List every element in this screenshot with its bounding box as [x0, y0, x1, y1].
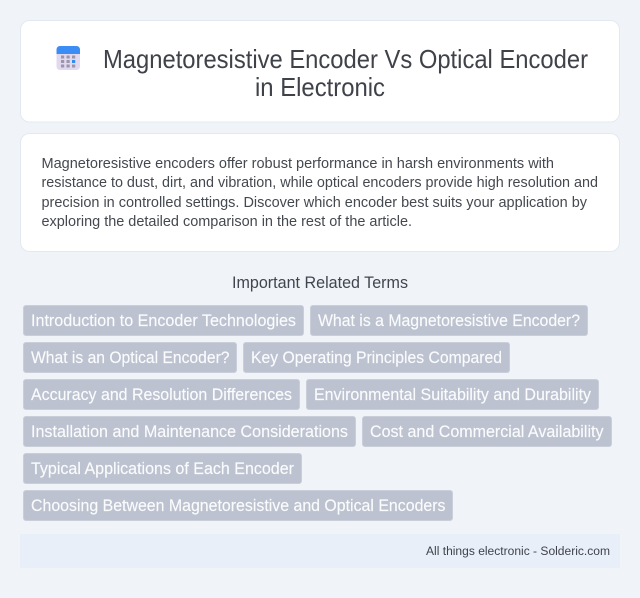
footer: All things electronic - Solderic.com [426, 544, 610, 558]
panel: summary paragraph: resistance to dust, dirt, and vibration, while optical encoders provide high resolution and [42, 175, 598, 191]
tag: installation: Installation and Maintenance Considerations [31, 422, 348, 441]
panel: summary paragraph: exploring the detailed comparison in the rest of the article. [42, 214, 412, 230]
tag: magnetoresistive encoder [310, 306, 588, 336]
panel: title card [20, 20, 620, 122]
tag: choosing [24, 490, 452, 520]
tag: applications: Typical Applications of Each Encoder [31, 459, 294, 478]
title: in Electronic [255, 72, 385, 102]
tag: introduction: Introduction to Encoder Technologies [31, 311, 296, 330]
tag: accuracy: Accuracy and Resolution Differences [31, 385, 292, 404]
tag: optical encoder [24, 342, 236, 372]
tag: installation [24, 416, 356, 446]
panel: summary paragraph [20, 134, 620, 252]
panel: summary paragraph: precision in controlled settings. Discover which encoder best suits your application by [42, 195, 588, 211]
tag: optical encoder: What is an Optical Encoder? [31, 348, 230, 367]
tag: environmental [306, 380, 598, 410]
footer [20, 534, 620, 568]
tag: magnetoresistive encoder: What is a Magnetoresistive Encoder? [318, 311, 580, 330]
tag: cost: Cost and Commercial Availability [370, 422, 604, 441]
icon: calendar [56, 46, 80, 70]
panel: summary paragraph: Magnetoresistive encoders offer robust performance in harsh environments with [42, 156, 554, 172]
tag: operating principles: Key Operating Principles Compared [251, 348, 502, 367]
tag: applications [24, 454, 302, 484]
tag: environmental: Environmental Suitability and Durability [314, 385, 592, 404]
title [103, 44, 588, 102]
heading: related terms: Important Related Terms [232, 274, 408, 292]
tag: accuracy [24, 380, 300, 410]
title: Magnetoresistive Encoder Vs Optical Encoder [103, 44, 588, 74]
tag: introduction [24, 306, 304, 336]
tag: operating principles [244, 342, 510, 372]
tag: choosing: Choosing Between Magnetoresistive and Optical Encoders [31, 496, 446, 515]
tag: cost [362, 416, 612, 446]
